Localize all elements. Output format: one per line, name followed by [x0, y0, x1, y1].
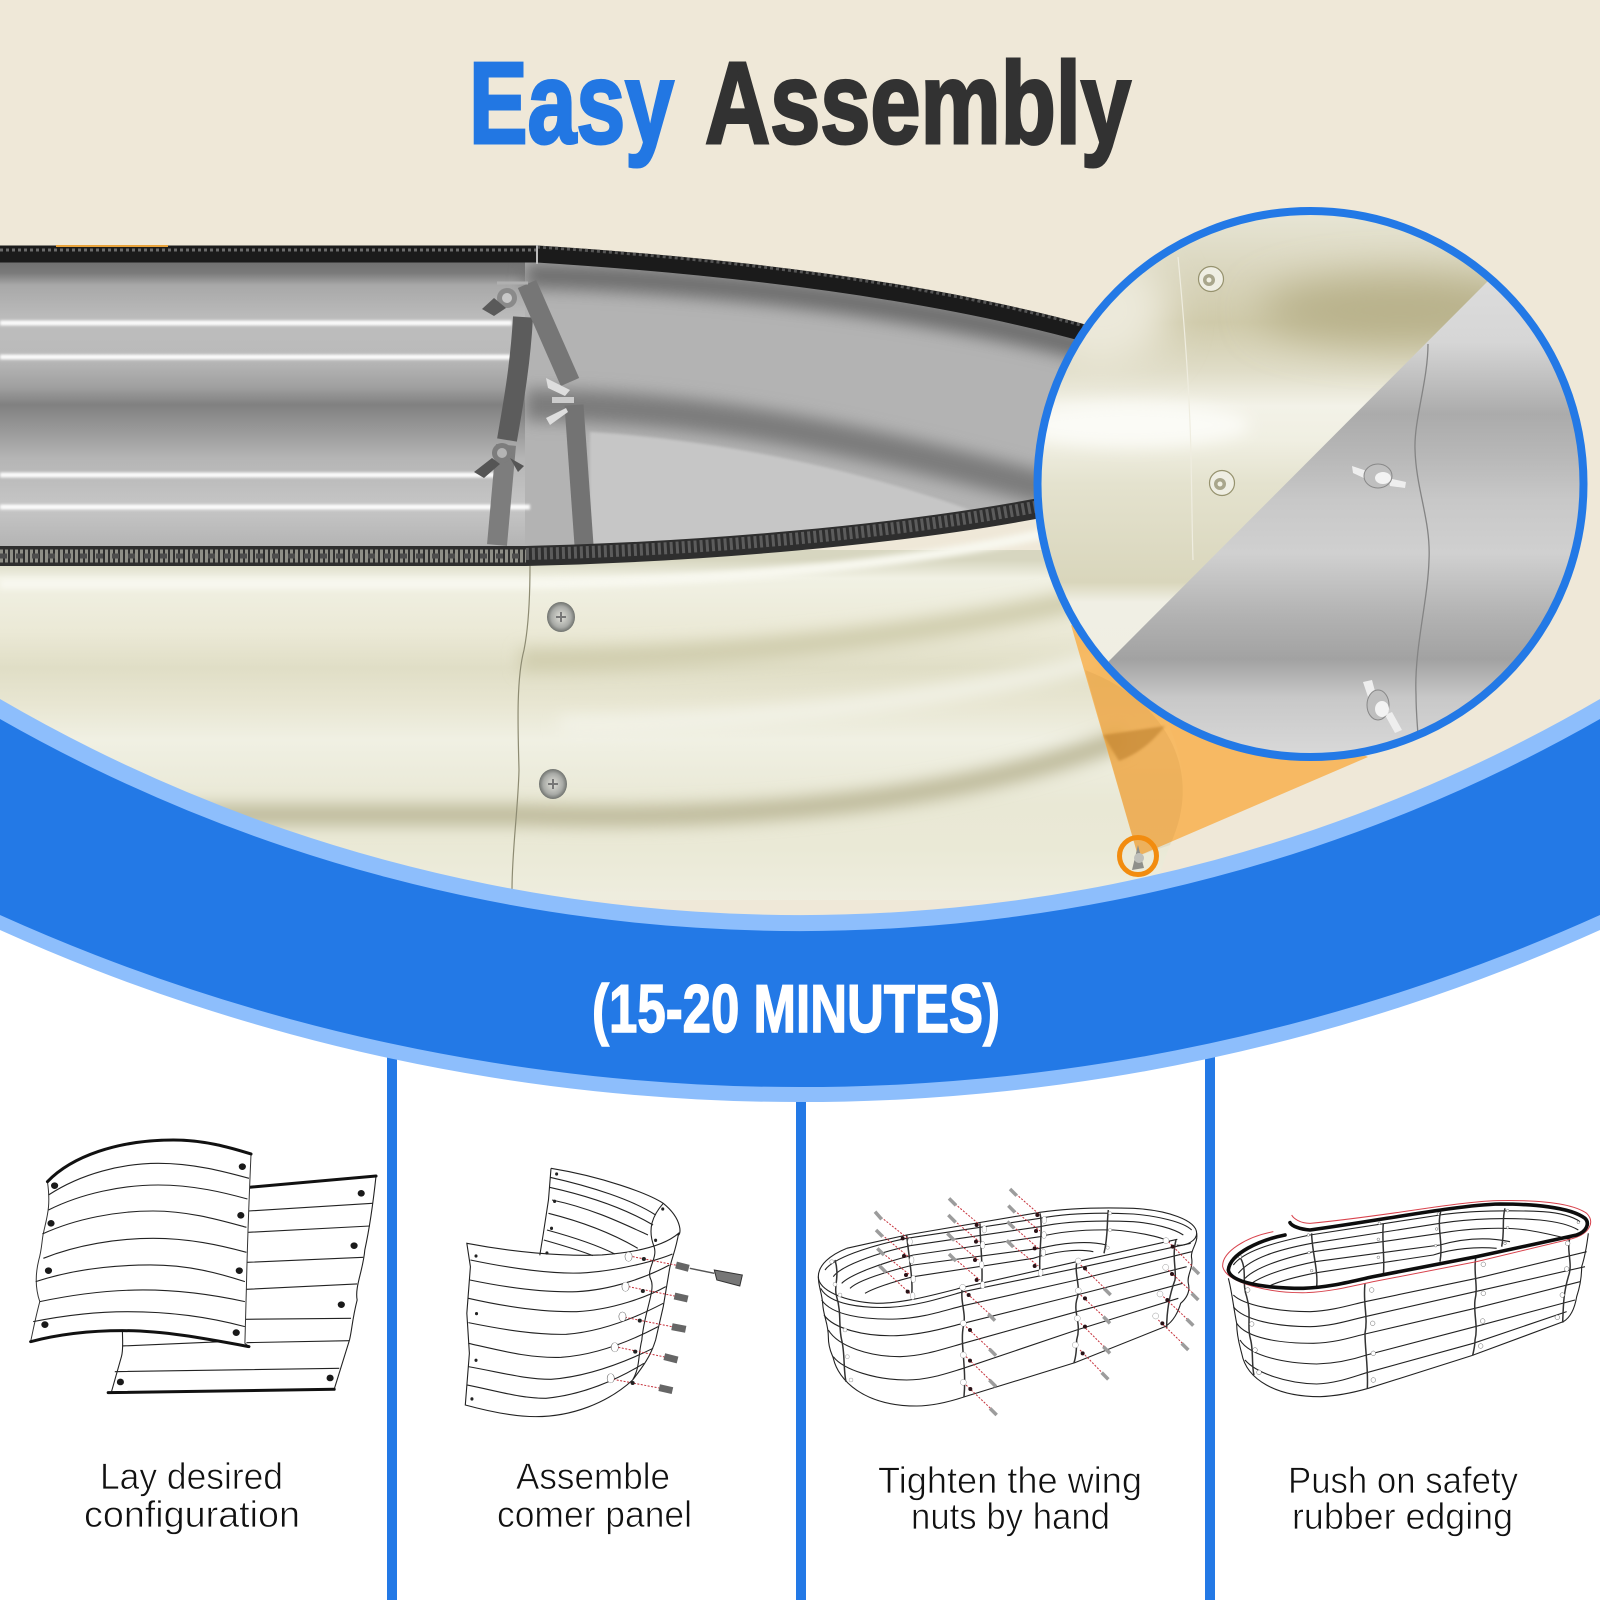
- icon: screw on seam, upper: [547, 602, 575, 632]
- photo: raised garden bed close-up: [0, 245, 1111, 889]
- step 3 caption: Tighten the wing: [878, 1460, 1142, 1501]
- icon: highlighted wing nut ring: [1120, 838, 1156, 874]
- step 4 caption: [1288, 1460, 1518, 1537]
- photo: grey interior wall: [0, 262, 1074, 546]
- icon: grey wing nut 2: [1363, 680, 1402, 733]
- icon: screw on seam, lower: [539, 769, 567, 799]
- photo: top black rubber rim: [0, 245, 1095, 336]
- curved band: [0, 699, 1600, 1102]
- photo: front rim with woven rubber edging: [0, 505, 1045, 556]
- grey panel detail: [1108, 282, 1580, 753]
- photo: cream outer wall: [0, 529, 1111, 889]
- duration label: (15-20 MINUTES): [592, 971, 1000, 1047]
- title: Assembly: [705, 38, 1131, 168]
- step 2 illustration: assemble corner panel: [465, 1168, 742, 1417]
- title: [469, 38, 1131, 168]
- zoom beam: [1071, 625, 1368, 856]
- step 3 caption: nuts by hand: [911, 1496, 1110, 1537]
- photo: panel seam: [512, 565, 530, 890]
- icon: grey wing nut 1: [1352, 464, 1406, 488]
- step 2 caption: [497, 1456, 692, 1535]
- step 1 caption: [84, 1456, 300, 1535]
- step 2 caption: Assemble: [516, 1456, 670, 1497]
- step 4 illustration: push on rubber edging: [1223, 1201, 1591, 1397]
- step 1 caption: Lay desired: [100, 1456, 283, 1497]
- magnifier circle: colour comparison: [1034, 207, 1588, 761]
- step 3 illustration: tighten wing nuts: [818, 1189, 1199, 1415]
- step 4 caption: rubber edging: [1292, 1496, 1513, 1537]
- panel dividers: [387, 1040, 1215, 1600]
- step 1 caption: configuration: [84, 1494, 300, 1535]
- step 3 caption: [878, 1460, 1142, 1537]
- beam overlay: bed silhouette: [1085, 670, 1183, 856]
- step 1 illustration: lay desired configuration: [31, 1140, 376, 1393]
- step 4 caption: Push on safety: [1288, 1460, 1518, 1501]
- title: Easy: [469, 38, 674, 168]
- step 2 caption: comer panel: [497, 1494, 692, 1535]
- icon: cream screw 2: [1210, 470, 1234, 496]
- lower white area: [0, 925, 1600, 1600]
- photo: inner bracket straps: [474, 283, 584, 545]
- cream panel detail: [1042, 215, 1488, 662]
- icon: cream screw 1: [1198, 266, 1224, 292]
